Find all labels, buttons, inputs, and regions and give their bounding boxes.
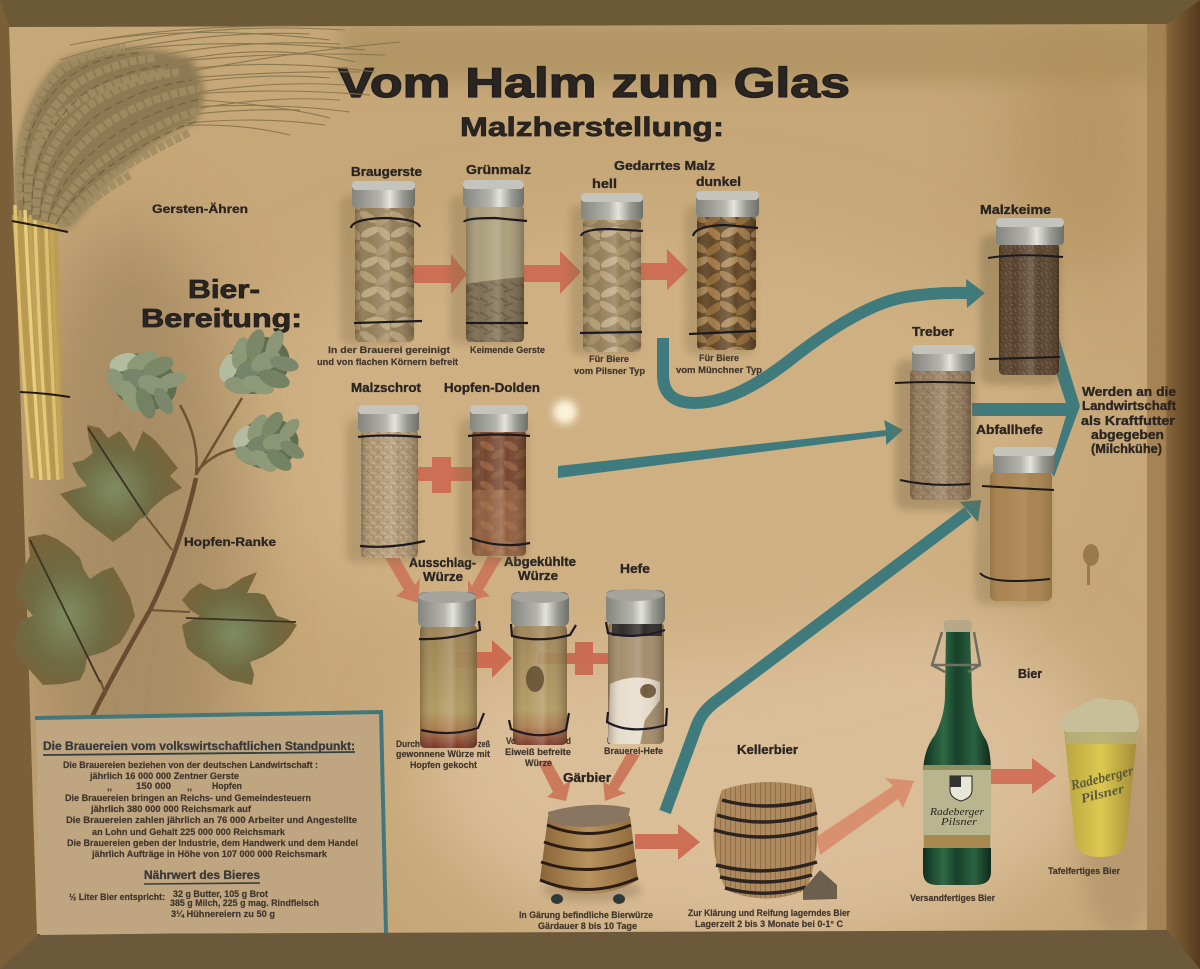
panel nutrition text: 32 g Butter, 105 g Brot [173, 889, 268, 899]
labels: wort and yeast: Würze [518, 568, 558, 583]
frame bottom edge [0, 930, 1200, 969]
arrow: hell to dunkel [640, 249, 688, 290]
vat feet [551, 894, 625, 904]
beer bottle [923, 620, 991, 885]
jar: Malzkeime [980, 218, 1064, 385]
heading: Bier-Bereitung: Bier- [188, 274, 260, 304]
labels: malt process: und von flachen Körnern befreit [317, 357, 458, 367]
jar: Ausschlag-Würze [418, 591, 484, 748]
labels: malt process: Hopfen-Dolden [444, 380, 540, 395]
labels: by-products: (Milchkühe) [1091, 441, 1162, 456]
barley wire ties [12, 221, 70, 397]
arrow: Braugerste to Grünmalz [413, 254, 467, 294]
leaf midribs [30, 428, 296, 682]
hop stems [92, 398, 242, 717]
labels: malt process [317, 158, 763, 395]
labels: malt process: Für Biere [699, 353, 739, 363]
heading: Bier-Bereitung [141, 274, 302, 333]
bottle label [923, 765, 991, 848]
jar: hell [570, 193, 643, 355]
beer glass: Radeberger [1068, 764, 1136, 794]
labels: by-products: abgegeben [1091, 427, 1164, 442]
arrow: Hopfen to Ausschlag-Würze [468, 556, 502, 601]
bottle label: Pilsner [940, 817, 977, 828]
panel economic text: jährlich Aufträge in Höhe von 107 000 000 Reichsmark [91, 849, 328, 859]
hop leaves [13, 425, 297, 685]
labels: malt process: Braugerste [351, 164, 422, 179]
panel nutrition text: 385 g Milch, 225 g mag. Rindfleisch [170, 898, 319, 908]
barley sheaf [12, 26, 400, 480]
teal arrow: waste yeast [665, 500, 981, 812]
panel economic text [63, 760, 358, 859]
labels: wort and yeast [396, 554, 663, 770]
labels: wort and yeast: Hefe [620, 561, 650, 576]
panel economic text: an Lohn und Gehalt 225 000 000 Reichsmark [92, 827, 286, 837]
labels: malt process: Grünmalz [466, 162, 532, 177]
labels: by-products: Landwirtschaft [1082, 398, 1177, 413]
beer glass: Pilsner [1079, 780, 1126, 806]
arrow: Würze to Gärbier [538, 760, 571, 801]
hop cones [91, 332, 195, 432]
barley ears [19, 48, 200, 225]
hop vine [13, 314, 310, 717]
panel economic text: jährlich 16 000 000 Zentner Gerste [89, 771, 239, 781]
labels: wort and yeast: Hopfen gekocht [410, 760, 477, 770]
panel: economic standpoint and nutrition [35, 712, 386, 935]
labels: wort and yeast: U [607, 736, 613, 746]
jar: Braugerste [340, 181, 422, 345]
panel nutrition text: 3¼ Hühnereiern zu 50 g [171, 909, 275, 919]
panel economic text: 150 000 [136, 781, 171, 791]
labels: fermentation and beer [519, 666, 1120, 931]
labels: wort and yeast: zeß [478, 739, 490, 749]
title: Vom Halm zum Glas [338, 59, 850, 106]
panel heading: Die Brauereien vom volkswirtschaftlichen Standpunkt: [43, 741, 355, 753]
labels: malt process: Malzschrot [351, 380, 422, 395]
jar: dunkel [685, 191, 759, 355]
frame left side [0, 0, 37, 969]
panel nutrition text [69, 889, 319, 919]
panel nutrition text: ½ Liter Bier entspricht: [69, 892, 165, 902]
reflection glare [553, 400, 577, 424]
heading: Bier-Bereitung: Bereitung: [141, 303, 302, 333]
labels: fermentation and beer: Lagerzeit 2 bis 3 Monate bei 0-1° C [695, 919, 843, 929]
jar: Treber [895, 345, 975, 510]
label: Hopfen-Ranke: Hopfen-Ranke [184, 535, 276, 549]
fermenting vat [540, 805, 642, 904]
arrow: Grünmalz to hell [524, 251, 581, 294]
labels: malt process: Keimende Gerste [470, 345, 545, 355]
labels: wort and yeast: Durch [396, 739, 420, 749]
labels: malt process: Gedarrtes Malz [614, 158, 716, 173]
panel economic text: ,, [107, 782, 112, 792]
teal arrow: malt sprouts [663, 279, 985, 403]
labels: wort and yeast: d [566, 736, 571, 746]
panel economic text: jährlich 380 000 000 Reichsmark auf [90, 804, 252, 814]
panel economic text: Die Brauereien bringen an Reichs- und Gemeindesteuern [65, 793, 311, 803]
panel economic text: ,, [187, 782, 192, 792]
labels: wort and yeast: Abgekühlte [504, 554, 576, 569]
jar: Hopfen-Dolden [458, 405, 530, 563]
labels: by-products: Werden an die [1082, 384, 1176, 399]
labels: malt process: hell [592, 176, 617, 191]
barley mass [15, 48, 204, 228]
panel economic text: Die Brauereien zahlen jährlich an 76 000 Arbeiter und Angestellte [66, 815, 357, 825]
arrow: Malzschrot to Ausschlag-Würze [385, 556, 420, 603]
bottle swing top [932, 620, 980, 672]
labels: by-products [912, 202, 1177, 456]
arrow: Hefe to Gärbier [603, 753, 640, 801]
jar: Malzschrot [346, 405, 425, 563]
panel nutrition heading: Nährwert des Bieres [144, 870, 260, 882]
beer glass [1062, 698, 1139, 857]
arrow: Ausschlag to Abgekühlte [455, 640, 512, 678]
plus: Malzschrot and Hopfen [417, 457, 472, 493]
cellar barrel [713, 782, 837, 900]
labels: malt process: vom Pilsner Typ [574, 366, 646, 376]
labels: wort and yeast: Vo [506, 736, 516, 746]
jar: Abgekühlte Würze [509, 591, 576, 745]
labels: malt process: Für Biere [589, 354, 629, 364]
subtitle: Malzherstellung: [460, 112, 724, 142]
panel economic text: Hopfen [212, 781, 242, 791]
beer foam [1062, 698, 1139, 732]
labels: fermentation and beer: Zur Klärung und Reifung lagerndes Bier [688, 908, 850, 918]
labels: malt process: In der Brauerei gereinigt [328, 345, 450, 355]
labels: fermentation and beer: Versandfertiges Bier [910, 893, 995, 903]
labels: wort and yeast: Brauerei-Hefe [604, 746, 663, 756]
arrow: Kellerbier to bottle [816, 778, 914, 855]
labels: wort and yeast: Ausschlag- [409, 555, 476, 570]
teal arrow: spent grains [558, 420, 903, 478]
jar: Abfallhefe [975, 447, 1055, 605]
barley stalks [12, 205, 64, 480]
labels: malt process: dunkel [696, 174, 741, 189]
labels: fermentation and beer: In Gärung befindliche Bierwürze [519, 910, 653, 920]
labels: by-products: Abfallhefe [976, 422, 1043, 437]
jar: Grünmalz [450, 180, 528, 345]
bottle label: Radeberger [929, 806, 985, 818]
panel economic text: Die Brauereien geben der Industrie, dem Handwerk und dem Handel [67, 838, 358, 848]
labels: fermentation and beer: Bier [1018, 666, 1042, 681]
labels: by-products: Treber [912, 324, 954, 339]
labels: wort and yeast: gewonnene Würze mit [396, 749, 490, 759]
labels: fermentation and beer: Gärbier [563, 770, 611, 785]
label: Gersten-Ähren: Gersten-Ähren [152, 203, 248, 216]
frame right side [1167, 0, 1200, 969]
barley awns [60, 26, 400, 135]
arrow: bottle to glass [990, 758, 1056, 794]
labels: fermentation and beer: Gärdauer 8 bis 10 Tage [538, 921, 637, 931]
panel teal border [35, 712, 386, 933]
jar: Hefe [606, 589, 667, 744]
panel economic text: Die Brauereien beziehen von der deutschen Landwirtschaft : [63, 760, 318, 770]
barley grain shadows [23, 53, 200, 224]
water stain [1083, 544, 1099, 585]
labels: fermentation and beer: Kellerbier [737, 742, 798, 757]
labels: wort and yeast: Würze [525, 758, 552, 768]
labels: by-products: als Kraftfutter [1081, 413, 1175, 428]
teal arrow: to agriculture [972, 338, 1080, 477]
labels: fermentation and beer: Tafelfertiges Bier [1048, 866, 1120, 876]
barrel wedge stone [803, 870, 837, 900]
arrow: Gärbier to Kellerbier [635, 824, 700, 860]
plus: Abgekühlte and Hefe [538, 642, 628, 675]
labels: wort and yeast: Eiweiß befreite [505, 747, 571, 757]
frame top edge [0, 0, 1200, 27]
labels: by-products: Malzkeime [980, 202, 1051, 217]
labels: wort and yeast: Würze [423, 569, 463, 584]
labels: malt process: vom Münchner Typ [676, 365, 763, 375]
